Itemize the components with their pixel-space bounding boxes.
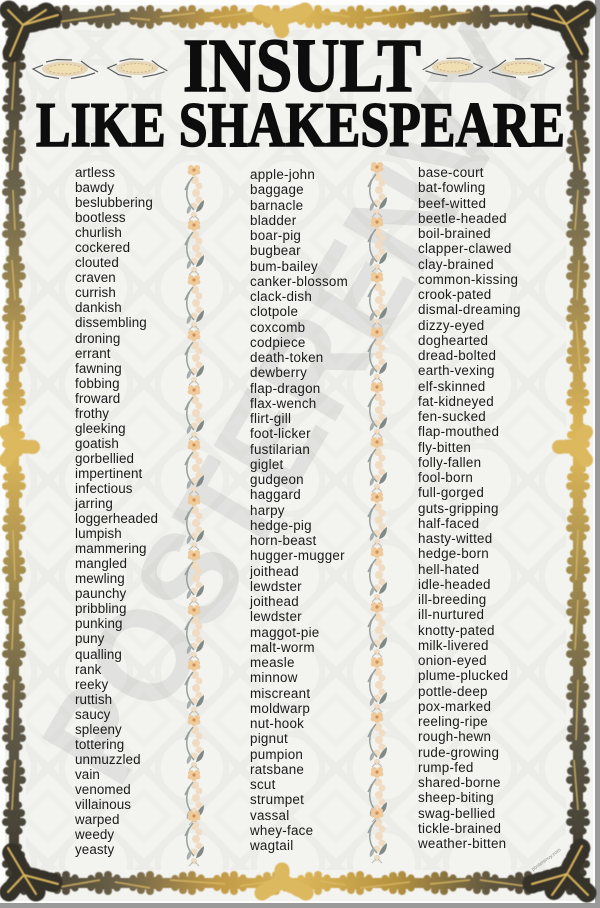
word column: adjectives: droning bbox=[75, 331, 120, 346]
word column: nouns: dewberry bbox=[250, 365, 307, 380]
word column: adjectives: dissembling bbox=[75, 315, 147, 330]
word column: nouns: codpiece bbox=[250, 335, 306, 350]
word column: adjectives: fobbing bbox=[75, 376, 120, 391]
word column: nouns: horn-beast bbox=[250, 533, 317, 548]
word column: compound adjectives: flap-mouthed bbox=[418, 424, 499, 439]
word column: compound adjectives: fool-born bbox=[418, 470, 473, 485]
word column: nouns: lewdster bbox=[250, 579, 302, 594]
word column: adjectives: artless bbox=[75, 165, 115, 180]
corn ornaments bbox=[33, 58, 554, 78]
title: INSULT bbox=[183, 24, 421, 108]
word column: nouns: whey-face bbox=[250, 823, 313, 838]
word column: nouns: clotpole bbox=[250, 304, 298, 319]
word column: compound adjectives: full-gorged bbox=[418, 485, 484, 500]
word column: compound adjectives: pottle-deep bbox=[418, 684, 488, 698]
word column: adjectives: rank bbox=[75, 662, 101, 677]
word column: nouns: scut bbox=[250, 777, 276, 792]
word column: compound adjectives: ill-breeding bbox=[418, 592, 487, 607]
word column: adjectives: reeky bbox=[75, 677, 108, 692]
word column: adjectives: beslubbering bbox=[75, 195, 153, 210]
word column: compound adjectives: half-faced bbox=[418, 516, 479, 531]
word column: adjectives: saucy bbox=[75, 707, 110, 722]
word column: compound adjectives: rump-fed bbox=[418, 760, 474, 775]
floral divider left bbox=[185, 165, 204, 866]
word column: adjectives: craven bbox=[75, 270, 116, 285]
word column: adjectives: dankish bbox=[75, 300, 122, 315]
word column: adjectives: impertinent bbox=[75, 466, 142, 481]
word column: adjectives: qualling bbox=[75, 646, 122, 662]
word column: nouns: wagtail bbox=[250, 838, 293, 853]
word column: adjectives: ruttish bbox=[75, 692, 112, 707]
word column: compound adjectives: elf-skinned bbox=[418, 378, 486, 394]
word column: compound adjectives: beef-witted bbox=[418, 196, 486, 210]
word column: compound adjectives: boil-brained bbox=[418, 226, 491, 241]
word column: nouns: flirt-gill bbox=[250, 411, 291, 426]
word column: nouns: vassal bbox=[250, 808, 289, 822]
word column: adjectives: tottering bbox=[75, 737, 124, 752]
word column: nouns: apple-john bbox=[250, 167, 315, 182]
word column: adjectives: frothy bbox=[75, 406, 109, 421]
word column: nouns: baggage bbox=[250, 182, 304, 197]
word column: compound adjectives: fat-kidneyed bbox=[418, 394, 494, 409]
word column: compound adjectives bbox=[418, 165, 521, 851]
word column: adjectives: errant bbox=[75, 346, 111, 361]
word column: compound adjectives: onion-eyed bbox=[418, 653, 487, 668]
word column: nouns: foot-licker bbox=[250, 426, 311, 441]
word column: nouns: strumpet bbox=[250, 792, 304, 807]
word column: nouns: hedge-pig bbox=[250, 518, 312, 533]
word column: nouns: joithead bbox=[250, 564, 299, 578]
word column: adjectives: yeasty bbox=[75, 842, 114, 857]
word column: adjectives: puny bbox=[75, 631, 104, 646]
word column: adjectives: mammering bbox=[75, 541, 147, 556]
word column: compound adjectives: bat-fowling bbox=[418, 180, 486, 195]
word column: adjectives bbox=[74, 165, 158, 857]
word column: adjectives: villainous bbox=[75, 797, 131, 812]
word column: nouns: ratsbane bbox=[250, 762, 304, 777]
word column: compound adjectives: reeling-ripe bbox=[418, 714, 488, 729]
word column: compound adjectives: tickle-brained bbox=[418, 821, 501, 836]
word column: nouns: flap-dragon bbox=[250, 380, 320, 396]
word column: compound adjectives: hasty-witted bbox=[418, 531, 492, 546]
word column: compound adjectives: shared-borne bbox=[418, 775, 501, 790]
word column: compound adjectives: knotty-pated bbox=[418, 622, 495, 638]
word column: nouns: lewdster bbox=[250, 609, 302, 624]
word column: nouns: giglet bbox=[250, 457, 284, 472]
word column: nouns: fustilarian bbox=[250, 442, 310, 456]
word column: compound adjectives: clapper-clawed bbox=[418, 241, 512, 256]
word column: adjectives: vain bbox=[75, 767, 100, 782]
word column: adjectives: mewling bbox=[75, 571, 125, 586]
word column: adjectives: clouted bbox=[75, 255, 119, 270]
word column: nouns: bugbear bbox=[250, 243, 301, 258]
word column: nouns: joithead bbox=[250, 594, 299, 609]
word column: adjectives: weedy bbox=[75, 827, 114, 842]
word column: compound adjectives: rough-hewn bbox=[418, 729, 491, 744]
word column: adjectives: jarring bbox=[75, 496, 113, 511]
word column: adjectives: currish bbox=[75, 285, 116, 300]
word column: nouns: measle bbox=[250, 655, 295, 670]
word column: nouns: pignut bbox=[250, 731, 288, 746]
word column: nouns: maggot-pie bbox=[250, 624, 320, 640]
word column: compound adjectives: rude-growing bbox=[418, 744, 499, 760]
word column: nouns: pumpion bbox=[250, 746, 303, 762]
word column: nouns: harpy bbox=[250, 502, 285, 518]
word column: nouns: barnacle bbox=[250, 198, 303, 212]
word column: compound adjectives: hell-hated bbox=[418, 562, 479, 576]
word column: nouns: bum-bailey bbox=[250, 258, 318, 274]
word column: adjectives: fawning bbox=[75, 361, 122, 376]
word column: compound adjectives: folly-fallen bbox=[418, 455, 481, 470]
word column: nouns: moldwarp bbox=[250, 701, 310, 716]
word column: adjectives: pribbling bbox=[75, 601, 127, 616]
word column: adjectives: froward bbox=[75, 391, 120, 406]
word column: adjectives: paunchy bbox=[75, 586, 126, 601]
word column: nouns: coxcomb bbox=[250, 320, 305, 334]
word column: nouns: canker-blossom bbox=[250, 274, 348, 289]
word column: compound adjectives: doghearted bbox=[418, 333, 488, 348]
word column: adjectives: punking bbox=[75, 616, 123, 631]
word column: adjectives: venomed bbox=[75, 782, 131, 797]
word column: nouns: hugger-mugger bbox=[250, 548, 345, 563]
floral divider right bbox=[368, 162, 387, 863]
word column: nouns: nut-hook bbox=[250, 716, 304, 731]
site mark: posterenvy.com bbox=[531, 847, 562, 873]
word column: compound adjectives: idle-headed bbox=[418, 577, 491, 592]
word column: compound adjectives: dread-bolted bbox=[418, 348, 496, 363]
word column: compound adjectives: fly-bitten bbox=[418, 440, 471, 454]
word column: adjectives: spleeny bbox=[75, 722, 122, 737]
word column: nouns: haggard bbox=[250, 487, 301, 502]
word column: compound adjectives: fen-sucked bbox=[418, 409, 486, 424]
word column: compound adjectives: plume-plucked bbox=[418, 668, 508, 683]
word column: compound adjectives: common-kissing bbox=[418, 272, 518, 287]
word column: adjectives: loggerheaded bbox=[75, 511, 158, 526]
word column: adjectives: gleeking bbox=[75, 421, 126, 436]
word column: nouns: minnow bbox=[250, 670, 298, 685]
word column: compound adjectives: clay-brained bbox=[418, 256, 494, 272]
word column: adjectives: unmuzzled bbox=[75, 752, 141, 767]
word column: nouns: malt-worm bbox=[250, 640, 315, 655]
word column: nouns: flax-wench bbox=[250, 396, 317, 411]
word column: adjectives: churlish bbox=[75, 225, 122, 240]
word column: compound adjectives: weather-bitten bbox=[418, 836, 506, 851]
word column: adjectives: goatish bbox=[75, 436, 119, 451]
word column: nouns: bladder bbox=[250, 213, 296, 228]
word column: compound adjectives: hedge-born bbox=[418, 546, 489, 561]
word column: compound adjectives: pox-marked bbox=[418, 699, 491, 714]
word column: compound adjectives: milk-livered bbox=[418, 638, 489, 653]
word column: adjectives: lumpish bbox=[75, 526, 122, 541]
word column: adjectives: warped bbox=[75, 812, 120, 827]
word column: adjectives: cockered bbox=[75, 240, 130, 255]
word column: compound adjectives: dizzy-eyed bbox=[418, 318, 485, 332]
word column: adjectives: gorbellied bbox=[75, 451, 134, 466]
title bbox=[36, 24, 565, 160]
word column: compound adjectives: ill-nurtured bbox=[418, 607, 484, 622]
word column: nouns: miscreant bbox=[250, 686, 310, 700]
word column: adjectives: bootless bbox=[75, 210, 126, 225]
word column: compound adjectives: swag-bellied bbox=[418, 806, 495, 820]
word column: nouns: gudgeon bbox=[250, 472, 304, 487]
word column: compound adjectives: earth-vexing bbox=[418, 363, 495, 378]
word column: adjectives: mangled bbox=[75, 556, 127, 571]
word column: compound adjectives: beetle-headed bbox=[418, 211, 507, 226]
word column: adjectives: infectious bbox=[75, 481, 133, 496]
word column: nouns bbox=[250, 167, 348, 853]
word column: nouns: boar-pig bbox=[250, 228, 301, 243]
word column: compound adjectives: crook-pated bbox=[418, 287, 491, 302]
word column: adjectives: bawdy bbox=[75, 180, 114, 195]
word column: compound adjectives: guts-gripping bbox=[418, 500, 499, 516]
word column: nouns: clack-dish bbox=[250, 289, 312, 304]
word column: nouns: death-token bbox=[250, 350, 323, 365]
word column: compound adjectives: sheep-biting bbox=[418, 790, 494, 805]
word column: compound adjectives: base-court bbox=[418, 165, 484, 180]
word column: compound adjectives: dismal-dreaming bbox=[418, 302, 521, 317]
